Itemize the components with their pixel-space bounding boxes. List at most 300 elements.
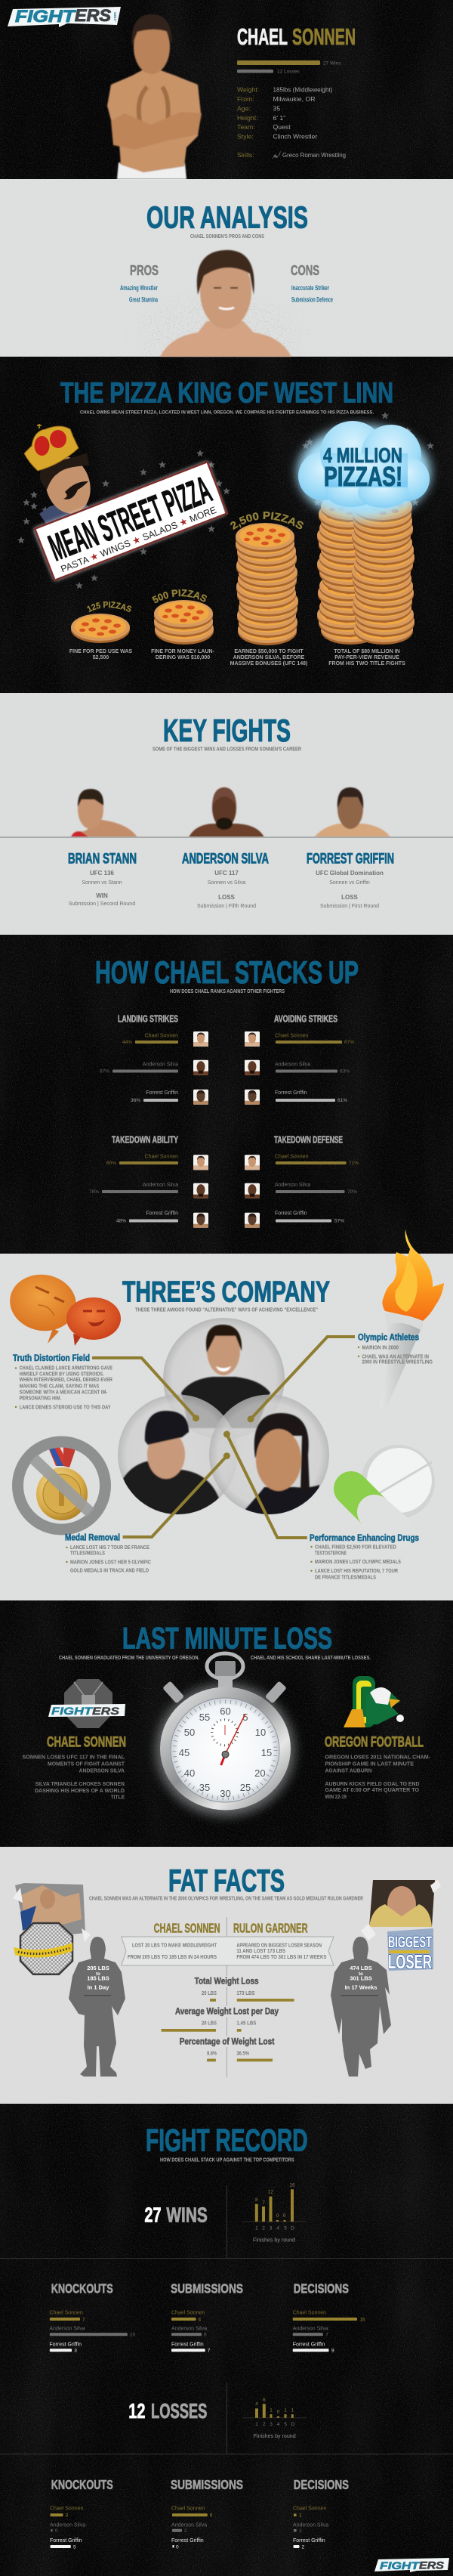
caption: 2,500 pizzas: MASSIVE BONUSES (UFC 148) (230, 661, 307, 666)
chart: wins by submission: 4 (198, 2317, 201, 2323)
pizza stack: 125 pizzas (71, 601, 131, 643)
logo: fighters cage (48, 1679, 125, 1728)
heading: fight record: FIGHT RECORD (146, 2123, 308, 2158)
pros list (120, 263, 159, 304)
text block: performance enhancing drugs: DE FRANCE TITLES/MEDALS (315, 1573, 376, 1580)
logo: Oregon duck (344, 1676, 404, 1727)
callout: 4 million pizzas cloud: PIZZAS! (324, 461, 402, 492)
chart: wins by submission: Anderson Silva (171, 2326, 207, 2331)
caption: 2,500 pizzas: ANDERSON SILVA, BEFORE (233, 655, 305, 660)
speckle behind fighter (131, 293, 308, 357)
text block: olympic athletes: CHAEL WAS AN ALTERNATE IN (362, 1353, 429, 1359)
fighter stats: Team: (237, 123, 255, 131)
chart: losses by submission: 6 (210, 2513, 213, 2518)
logo: fighters cage: ERS (92, 1705, 120, 1717)
chart: losses by decision: DECISIONS (294, 2477, 349, 2492)
text block: performance enhancing drugs: TESTOSTERONE (315, 1550, 347, 1557)
chart: losses by submission: Anderson Silva (171, 2522, 207, 2528)
text block: Oregon loss: GAME AT 0:00 OF 4TH QUARTER TO (325, 1786, 419, 1793)
text block: truth distortion field: CHAEL CLAIMED LANCE ARMSTRONG GAVE (20, 1365, 112, 1371)
chart: losses by decision: 2 (302, 2544, 305, 2550)
fighter stats: Clinch Wrestler (273, 133, 317, 141)
chart: losses by knockout: 5 (73, 2544, 76, 2550)
chart: losses by submission (171, 2477, 243, 2550)
chart: takedown defense (245, 1135, 359, 1228)
chart: avoiding strikes: Forrest Griffin (275, 1090, 307, 1096)
pizza stack: 2,500 pizzas (230, 512, 304, 645)
chart: losses finishes by round: 3 (270, 2422, 273, 2427)
subheading: CHAEL SONNEN'S PROS AND CONS (190, 234, 264, 240)
chart: landing strikes: 67% (100, 1068, 109, 1075)
chart: wins by decision: 9 (331, 2349, 334, 2353)
record bars (237, 60, 341, 74)
chart: losses by submission: Forrest Griffin (171, 2538, 204, 2544)
chart: wins by knockout: 3 (74, 2349, 77, 2353)
chart: losses finishes by round: 1 (255, 2422, 258, 2427)
photo: Anderson Silva (189, 787, 264, 837)
chart: wins finishes by round: 0 (283, 2213, 286, 2219)
text block: medal removal: LANCE LOST HIS 7 TOUR DE FRANCE (70, 1544, 149, 1551)
chart: takedown ability (89, 1135, 208, 1228)
chart: losses by knockout: Chael Sonnen (50, 2506, 83, 2512)
panel: fight record (0, 2123, 453, 2572)
photo: Forrest Griffin (314, 787, 390, 837)
pizza stack: 2,500 pizzas: 2,500 PIZZAS (230, 512, 304, 530)
chart: takedown defense: TAKEDOWN DEFENSE (274, 1135, 343, 1146)
stopwatch: 50 (184, 1727, 195, 1738)
chart: wins by knockout (49, 2281, 136, 2353)
caption: 125 pizzas: FINE FOR PED USE WAS (69, 649, 132, 654)
text block: Oregon loss: AUBURN KICKS FIELD GOAL TO END (325, 1780, 420, 1787)
chart: wins by knockout: KNOCKOUTS (51, 2281, 113, 2296)
subheading: CHAEL SONNEN WAS AN ALTERNATE IN THE 2000 OLYMPICS FOR WRESTLING, ON THE SAME TEAM AS GOLD MEDALIST RULON GARDNER (89, 1897, 363, 1902)
chart: percentage of weight lost (177, 2036, 277, 2061)
panel: the pizza king of west linn: MEAN STREET PIZZA (43, 469, 217, 569)
chart: losses by submission: 0 (176, 2544, 179, 2550)
chart: average weight lost per day: 1.45 LBS (236, 2019, 257, 2026)
fight: Anderson Silva: ANDERSON SILVA (182, 851, 269, 867)
pros list: Great Stamina (129, 295, 158, 304)
chart: losses by decision: Forrest Griffin (293, 2538, 325, 2544)
chart: wins finishes by round: 16 (289, 2183, 295, 2188)
subheading right: CHAEL AND HIS SCHOOL SHARE LAST-MINUTE LOSSES. (251, 1656, 371, 1661)
chart: losses by knockout: 0 (55, 2528, 58, 2534)
fighter stats: 185lbs (Middleweight) (273, 86, 333, 94)
total: 27 wins (144, 2203, 208, 2227)
panel: the pizza king of west linn (17, 378, 439, 666)
caption: 2,500 pizzas (230, 649, 307, 666)
caption: 500 pizzas (151, 649, 215, 660)
chart: landing strikes: Chael Sonnen (145, 1034, 178, 1039)
icon: olympic torch (380, 1229, 444, 1409)
chart: losses finishes by round: 4 (255, 2401, 258, 2407)
silhouette: Rulon Gardner: to (359, 1972, 363, 1977)
fighter stats: Skills: (237, 151, 254, 159)
chart: wins by decision: 7 (325, 2332, 328, 2338)
fighter stats: Age: (237, 105, 251, 113)
caption: 500 pizzas: DERING WAS $10,000 (156, 655, 210, 660)
total: 12 losses: 12 (128, 2399, 145, 2423)
fight: Brian Stann: BRIAN STANN (68, 851, 137, 867)
fight: Anderson Silva: UFC 117 (214, 870, 239, 877)
cons list (291, 263, 333, 304)
text block: olympic athletes: Olympic Athletes (358, 1333, 419, 1342)
ribbon banner: 11 AND LOST 173 LBS (236, 1947, 285, 1954)
chart: takedown defense: Forrest Griffin (275, 1211, 307, 1217)
chart: takedown ability: Anderson Silva (143, 1183, 178, 1188)
chart: total weight loss: 20 LBS (202, 1990, 217, 1996)
photo: Brian Stann (71, 789, 137, 837)
silhouette: Rulon Gardner (331, 1937, 391, 2077)
fighter stats: From: (237, 95, 254, 103)
illustration: king head with crown and moustache (24, 424, 97, 538)
divider line (0, 837, 453, 838)
text block: Oregon loss (325, 1735, 430, 1800)
ribbon banner (122, 1937, 334, 1965)
chart: losses by decision (293, 2477, 349, 2550)
fight: Brian Stann: Submission | Second Round (69, 901, 135, 907)
chart: losses finishes by round: 2 (263, 2422, 266, 2427)
chart: takedown ability: 48% (116, 1218, 126, 1224)
panel: fighter profile header (8, 6, 356, 179)
pizza stack: 500 pizzas: 500 PIZZAS (152, 589, 207, 603)
chart: losses finishes by round (242, 2398, 307, 2439)
chart: takedown defense: Chael Sonnen (275, 1154, 308, 1159)
chart: landing strikes: Anderson Silva (143, 1062, 178, 1067)
comparison center line (226, 1917, 227, 2077)
fighter stats: 35 (273, 105, 280, 113)
chart: losses by decision: Chael Sonnen (293, 2506, 326, 2512)
title: Chael Sonnen (237, 23, 356, 50)
caption: 125 pizzas: $2,500 (93, 655, 109, 660)
title: Chael Sonnen: SONNEN (292, 23, 356, 50)
chart: takedown defense: 70% (347, 1189, 357, 1195)
icon: cage with tape measure (14, 1923, 72, 1975)
icon: removed gold medal (18, 1437, 106, 1529)
logo: Fighters.com: ERS (75, 6, 111, 25)
circle: Lance Armstrong (118, 1395, 238, 1519)
text block: Chael Sonnen loss: CHAEL SONNEN (47, 1735, 126, 1751)
chart: losses by knockout: Anderson Silva (50, 2522, 85, 2528)
chart: wins by submission: Chael Sonnen (171, 2310, 205, 2315)
chart: wins finishes by round: 5 (284, 2226, 287, 2231)
total: 12 losses: LOSSES (151, 2399, 207, 2423)
pizza stack: 125 pizzas: 125 PIZZAS (87, 601, 131, 612)
text block: Oregon loss: PIONSHIP GAME IN LAST MINUTE (325, 1761, 414, 1767)
chart: wins by knockout: 7 (82, 2317, 85, 2323)
fight: Anderson Silva (182, 851, 269, 909)
subheading: SOME OF THE BIGGEST WINS AND LOSSES FROM SONNEN'S CAREER (153, 747, 301, 752)
venn diagram: three fighters (118, 1318, 329, 1519)
chart: wins by decision: Chael Sonnen (293, 2310, 326, 2315)
panel: fat facts (13, 1863, 441, 2077)
photo: Chael Sonnen head and shoulders (160, 250, 291, 357)
chart: wins by decision (293, 2281, 365, 2353)
heading: three's company: THREE’S COMPANY (122, 1276, 330, 1308)
stopwatch: 20 (254, 1767, 266, 1779)
chart: wins by decision: DECISIONS (294, 2281, 349, 2296)
stopwatch: 30 (220, 1788, 231, 1799)
chart: losses by submission: Chael Sonnen (171, 2506, 205, 2512)
text block: Oregon loss: AGAINST AUBURN (325, 1767, 371, 1774)
chart: losses finishes by round: 6 (263, 2398, 266, 2403)
fighter stats: Greco Roman Wrestling (282, 151, 346, 159)
chart: losses by knockout: KNOCKOUTS (51, 2477, 113, 2492)
heading: our analysis: OUR ANALYSIS (146, 199, 308, 234)
fight: Anderson Silva: Sonnen vs Silva (208, 880, 245, 886)
logo: Fighters.com footer: ERS (419, 2559, 445, 2571)
circle: Marion Jones (209, 1395, 329, 1519)
chart: wins finishes by round: 1 (255, 2226, 258, 2231)
chart: takedown ability: Forrest Griffin (146, 1211, 178, 1217)
chart: wins finishes by round: 12 (268, 2190, 273, 2195)
chart: takedown defense: 71% (349, 1161, 359, 1166)
decorative stars (17, 412, 434, 589)
callout line: truth distortion field (92, 1358, 199, 1421)
text block: performance enhancing drugs: Performance Enhancing Drugs (310, 1534, 419, 1543)
chart: average weight lost per day: 20 LBS (202, 2019, 217, 2026)
chart: losses by decision: 1 (299, 2513, 302, 2518)
stopwatch: 60 (220, 1705, 231, 1717)
subheading left: CHAEL SONNEN GRADUATED FROM THE UNIVERSITY OF OREGON. (59, 1656, 199, 1661)
photo: Rulon Gardner with tape corners (361, 1880, 441, 1941)
chart: wins finishes by round (242, 2183, 307, 2244)
chart: takedown ability: Chael Sonnen (145, 1154, 178, 1159)
chart: wins by submission (171, 2281, 243, 2353)
stopwatch: 25 (240, 1782, 251, 1793)
fight: Forrest Griffin: LOSS (341, 894, 359, 901)
chart: wins finishes by round: 2 (262, 2226, 265, 2231)
chart: wins finishes by round: D (291, 2226, 294, 2231)
logo: biggest loser (387, 1928, 433, 1973)
icon: pills (351, 1445, 435, 1532)
text block: Chael Sonnen loss: SILVA TRIANGLE CHOKES SONNEN (35, 1780, 125, 1787)
pizza stack: 500 pizzas (152, 589, 214, 645)
caption: 4 million pizzas: PAY-PER-VIEW REVENUE (334, 655, 399, 660)
chart: losses finishes by round: 5 (284, 2422, 287, 2427)
chart: wins finishes by round: 0 (276, 2213, 279, 2219)
chart: wins by decision: 16 (359, 2317, 365, 2323)
chart: total weight loss: Total Weight Loss (195, 1976, 259, 1987)
names: Chael vs Rulon: RULON GARDNER (233, 1920, 308, 1935)
caption: 500 pizzas: FINE FOR MONEY LAUN- (151, 649, 215, 654)
chart: takedown ability: 60% (106, 1161, 116, 1166)
chart: losses by submission: 2 (184, 2528, 187, 2534)
ribbon banner: LOST 20 LBS TO MAKE MIDDLEWEIGHT (132, 1942, 217, 1949)
chart: takedown defense: 57% (334, 1218, 344, 1224)
chart: total weight loss: 173 LBS (236, 1990, 255, 1996)
text block: performance enhancing drugs: CHAEL FINED $2,500 FOR ELEVATED (315, 1543, 396, 1550)
logo: Fighters.com footer (374, 2558, 449, 2572)
sign: Mean Street Pizza: PASTA ★ WINGS ★ SALADS ★ MORE (60, 505, 218, 574)
total: 27 wins: 27 (144, 2203, 162, 2227)
stopwatch (156, 1653, 294, 1817)
total: 12 losses (128, 2399, 207, 2423)
stopwatch: 55 (199, 1712, 210, 1723)
text block: Oregon loss: OREGON LOSES 2011 NATIONAL CHAM- (325, 1754, 430, 1761)
logo: Fighters.com: FIGHT (15, 7, 76, 26)
chart: wins by submission: SUBMISSIONS (171, 2281, 243, 2296)
chart: landing strikes: 36% (131, 1098, 140, 1103)
stopwatch: 10 (255, 1727, 266, 1738)
panel: three's company (5, 1229, 444, 1580)
chart: avoiding strikes: 67% (344, 1040, 354, 1045)
chart: landing strikes: Forrest Griffin (146, 1090, 178, 1096)
text block: truth distortion field: WHEN INTERVIEWED, CHAEL DENIED EVER (20, 1376, 113, 1383)
text block: truth distortion field: SOMEONE WITH A MEXICAN ACCENT IM- (20, 1388, 108, 1395)
logo: Fighters.com: .com (113, 12, 118, 22)
sign: Mean Street Pizza (34, 462, 227, 580)
chart: wins by submission: Forrest Griffin (171, 2342, 204, 2347)
chart: wins finishes by round: 7 (262, 2200, 265, 2206)
caption: 4 million pizzas (328, 649, 405, 666)
chart: losses by knockout: Forrest Griffin (50, 2538, 82, 2544)
fighter stats: Style: (237, 133, 254, 141)
text block: olympic athletes (358, 1333, 433, 1365)
panel: our analysis (113, 199, 333, 357)
photo: Chael at weigh-in with tape corners (13, 1883, 91, 1942)
fight: Anderson Silva: LOSS (218, 894, 236, 901)
subheading: CHAEL OWNS MEAN STREET PIZZA, LOCATED IN WEST LINN, OREGON. WE COMPARE HIS FIGHTER EARNINGS TO HIS PIZZA BUSINESS. (80, 410, 374, 416)
stopwatch: 15 (261, 1747, 272, 1758)
text block: olympic athletes: 2000 IN FREESTYLE WRESTLING (362, 1359, 433, 1365)
silhouette: Rulon Gardner: In 17 Weeks (345, 1984, 377, 1991)
text block: Chael Sonnen loss (23, 1735, 126, 1801)
chart: wins by knockout: Chael Sonnen (49, 2310, 83, 2315)
chart: percentage of weight lost: 9.8% (207, 2049, 217, 2056)
text block: performance enhancing drugs: LANCE LOST HIS REPUTATION, 7 TOUR (315, 1567, 399, 1574)
silhouette: Chael Sonnen (69, 1937, 125, 2077)
silhouette: Rulon Gardner: 474 LBS (350, 1965, 372, 1971)
chart: wins by decision: Forrest Griffin (293, 2342, 325, 2347)
chart: losses finishes by round: D (291, 2422, 295, 2427)
fighter stats (237, 86, 346, 159)
callout line: medal removal (123, 1452, 230, 1537)
chart: avoiding strikes: Anderson Silva (275, 1062, 310, 1067)
chart: avoiding strikes: Chael Sonnen (275, 1034, 308, 1039)
circle: Chael Sonnen (163, 1318, 285, 1440)
record bars: 12 Losses (277, 70, 300, 74)
losses divider lines (0, 2382, 453, 2454)
ribbon banner: FROM 474 LBS TO 301 LBS IN 17 WEEKS (236, 1953, 327, 1960)
names: Chael vs Rulon (154, 1920, 308, 1935)
chart: avoiding strikes: 61% (337, 1098, 347, 1103)
fighter stats: Weight: (237, 86, 259, 94)
chart: losses finishes by round: Finishes by round (254, 2432, 296, 2439)
chart: landing strikes: LANDING STRIKES (118, 1014, 178, 1025)
text block: truth distortion field: LANCE DENIES STEROID USE TO THIS DAY (20, 1403, 111, 1410)
stopwatch: 35 (199, 1782, 210, 1793)
photo: Chael Sonnen arms crossed (107, 14, 202, 179)
pizza stack: 4 million pizzas (317, 493, 414, 645)
chart: takedown ability: TAKEDOWN ABILITY (112, 1135, 178, 1146)
logo: Fighters.com (8, 6, 121, 27)
chart: losses by decision: Anderson Silva (293, 2522, 328, 2528)
chart: losses by submission: SUBMISSIONS (171, 2477, 243, 2492)
callout: 4 million pizzas cloud (297, 421, 430, 519)
caption: 4 million pizzas: TOTAL OF $80 MILLION IN (334, 649, 400, 654)
stopwatch: 40 (184, 1767, 195, 1779)
text block: Oregon loss: WIN 22-19 (325, 1793, 347, 1800)
fight: Brian Stann: WIN (96, 892, 108, 899)
text block: Chael Sonnen loss: SONNEN LOSES UFC 117 IN THE FINAL (23, 1754, 125, 1761)
chart: landing strikes (100, 1014, 208, 1105)
cons list: CONS (291, 263, 319, 278)
chart: losses finishes by round: 4 (277, 2422, 280, 2427)
cons list: Submission Defence (291, 295, 333, 304)
chart: wins finishes by round: Finishes by round (253, 2237, 295, 2244)
panel: last minute loss (23, 1622, 430, 1817)
subheading: HOW DOES CHAEL STACK UP AGAINST THE TOP COMPETITORS (160, 2158, 294, 2163)
text block: truth distortion field: Truth Distortion Field (13, 1354, 90, 1363)
fight: Brian Stann: Sonnen vs Stann (82, 880, 122, 886)
silhouette: Chael Sonnen: In 1 Day (88, 1984, 109, 1991)
text block: medal removal: GOLD MEDALS IN TRACK AND FIELD (70, 1566, 149, 1573)
chart: wins by knockout: Forrest Griffin (49, 2342, 82, 2347)
text block: truth distortion field: MAKING THE CLAIM, SAYING IT WAS (20, 1382, 99, 1389)
caption: 2,500 pizzas: EARNED $50,000 TO FIGHT (234, 649, 304, 654)
callout line: olympic athletes (248, 1337, 355, 1422)
fight: Forrest Griffin: UFC Global Domination (316, 870, 384, 877)
chart: average weight lost per day: Average Weight Lost per Day (175, 2006, 279, 2017)
chart: losses by knockout (50, 2477, 113, 2550)
silhouette: Chael Sonnen: 185 LBS (87, 1975, 109, 1982)
fight: Anderson Silva: Submission | Fifth Round (197, 904, 256, 909)
callout: 4 million pizzas cloud: 4 MILLION (323, 444, 402, 467)
text block: medal removal (65, 1533, 151, 1573)
wins divider lines (0, 2186, 453, 2258)
chart: wins by submission: 6 (204, 2332, 207, 2338)
title: Chael Sonnen: CHAEL (237, 23, 288, 50)
chart: wins by knockout: 20 (130, 2332, 136, 2338)
text block: Chael Sonnen loss: ANDERSON SILVA (79, 1767, 125, 1774)
logo: Fighters.com footer: FIGHT (380, 2559, 421, 2571)
text block: performance enhancing drugs (310, 1534, 419, 1580)
total: 27 wins: WINS (166, 2203, 208, 2227)
chart: wins finishes by round: 3 (270, 2226, 273, 2231)
caption: 4 million pizzas: FROM HIS TWO TITLE FIGHTS (328, 661, 405, 666)
text block: medal removal: TITLES/MEDALS (70, 1550, 105, 1557)
ribbon banner: APPEARED ON BIGGEST LOSER SEASON (236, 1942, 322, 1949)
chart: wins by submission: 7 (208, 2349, 211, 2353)
chart: total weight loss (189, 1976, 294, 2002)
fight: Brian Stann: UFC 136 (90, 870, 115, 877)
chart: landing strikes: 44% (122, 1040, 132, 1045)
chart: wins finishes by round: 4 (276, 2226, 279, 2231)
chart: percentage of weight lost: Percentage of Weight Lost (180, 2036, 275, 2046)
chart: losses by knockout: 3 (65, 2513, 68, 2518)
chart: takedown ability: 78% (89, 1189, 99, 1195)
chart: avoiding strikes: AVOIDING STRIKES (274, 1014, 337, 1025)
callout line: performance enhancing drugs (223, 1431, 307, 1538)
fighter stats: Quest (273, 123, 291, 131)
ribbon banner: FROM 205 LBS TO 185 LBS IN 24 HOURS (128, 1953, 217, 1960)
heading: key fights: KEY FIGHTS (163, 713, 291, 748)
subheading: HOW DOES CHAEL RANKS AGAINST OTHER FIGHTERS (170, 989, 285, 994)
chart: percentage of weight lost: 36.5% (236, 2049, 249, 2056)
heading: fat facts: FAT FACTS (168, 1863, 285, 1898)
chart: average weight lost per day (162, 2006, 281, 2032)
fight: Forrest Griffin: Sonnen vs Griffin (329, 880, 370, 886)
fight: Brian Stann (68, 851, 137, 907)
chart: wins finishes by round: 8 (255, 2197, 258, 2203)
text block: Chael Sonnen loss: MOMENTS OF FIGHT AGAINST (48, 1761, 125, 1767)
fight: Forrest Griffin (307, 851, 394, 909)
text block: performance enhancing drugs: MARION JONES LOST OLYMPIC MEDALS (315, 1558, 401, 1565)
panel: key fights (0, 713, 453, 909)
silhouette: Rulon Gardner: 301 LBS (350, 1975, 372, 1982)
chart: losses finishes by round: 1 (284, 2407, 287, 2413)
